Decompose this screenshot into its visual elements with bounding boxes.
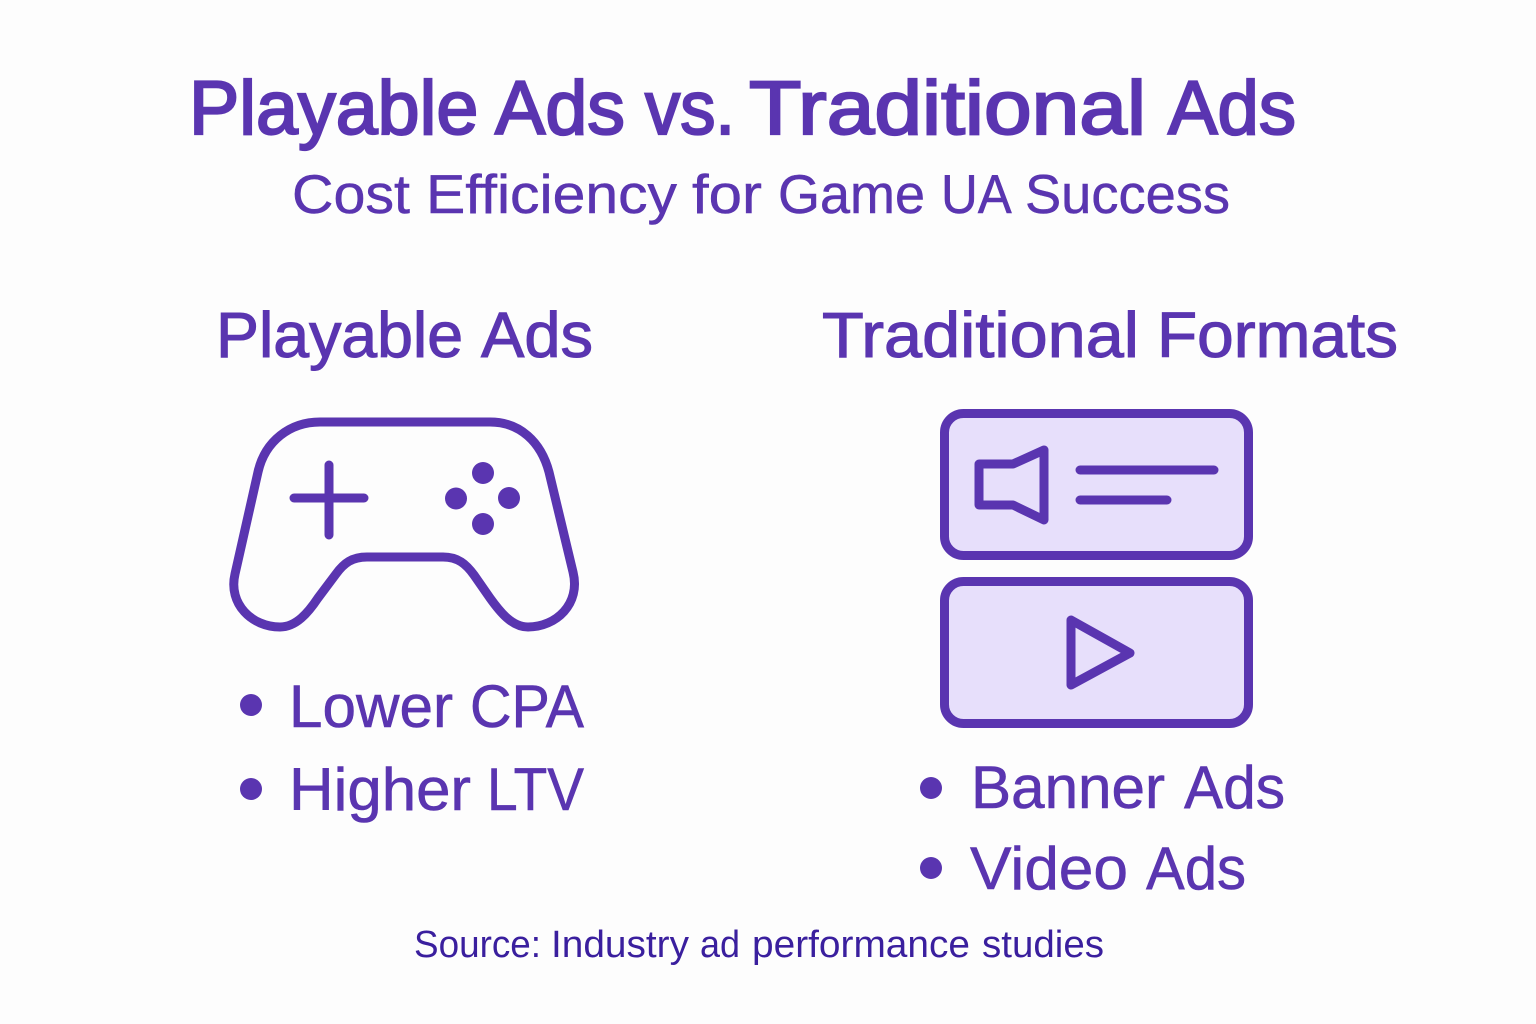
source note: Industry bbox=[551, 924, 689, 966]
heading: playable ads: Ads bbox=[481, 299, 593, 371]
heading: traditional formats: Traditional bbox=[822, 299, 1139, 371]
list: traditional formats bbox=[920, 754, 1285, 902]
subtitle: Efficiency bbox=[426, 163, 678, 225]
subtitle: Cost bbox=[292, 163, 410, 225]
title: Traditional bbox=[749, 66, 1146, 151]
list: traditional formats: Ads bbox=[1184, 754, 1285, 821]
list: traditional formats: Ads bbox=[1146, 835, 1246, 902]
list: playable ads benefits bbox=[240, 673, 584, 823]
icon: game controller bbox=[234, 422, 575, 627]
title: vs. bbox=[645, 66, 735, 151]
panel: playable ads bbox=[216, 299, 593, 823]
list: playable ads benefits: Lower bbox=[289, 673, 453, 740]
list: playable ads benefits: Higher bbox=[289, 756, 471, 823]
list: playable ads benefits: LTV bbox=[487, 756, 584, 823]
list: traditional formats: Banner bbox=[971, 754, 1165, 821]
icon: video ad bbox=[944, 582, 1248, 724]
subtitle: for bbox=[692, 163, 762, 225]
subtitle: UA bbox=[941, 163, 1012, 225]
source note: performance bbox=[752, 924, 970, 966]
title: Ads bbox=[1168, 66, 1296, 151]
subtitle: Success bbox=[1025, 163, 1230, 225]
heading: traditional formats: Formats bbox=[1157, 299, 1398, 371]
heading: playable ads: Playable bbox=[216, 299, 463, 371]
list: playable ads benefits: CPA bbox=[470, 673, 584, 740]
subtitle: Game bbox=[778, 163, 925, 225]
source note: ad bbox=[700, 924, 740, 966]
source note: studies bbox=[982, 924, 1104, 966]
icon: banner ad bbox=[944, 414, 1248, 556]
source note: Source: bbox=[414, 924, 541, 966]
list: traditional formats: Video bbox=[970, 835, 1128, 902]
title: Playable Ads bbox=[189, 66, 625, 151]
panel: traditional formats bbox=[822, 299, 1398, 902]
